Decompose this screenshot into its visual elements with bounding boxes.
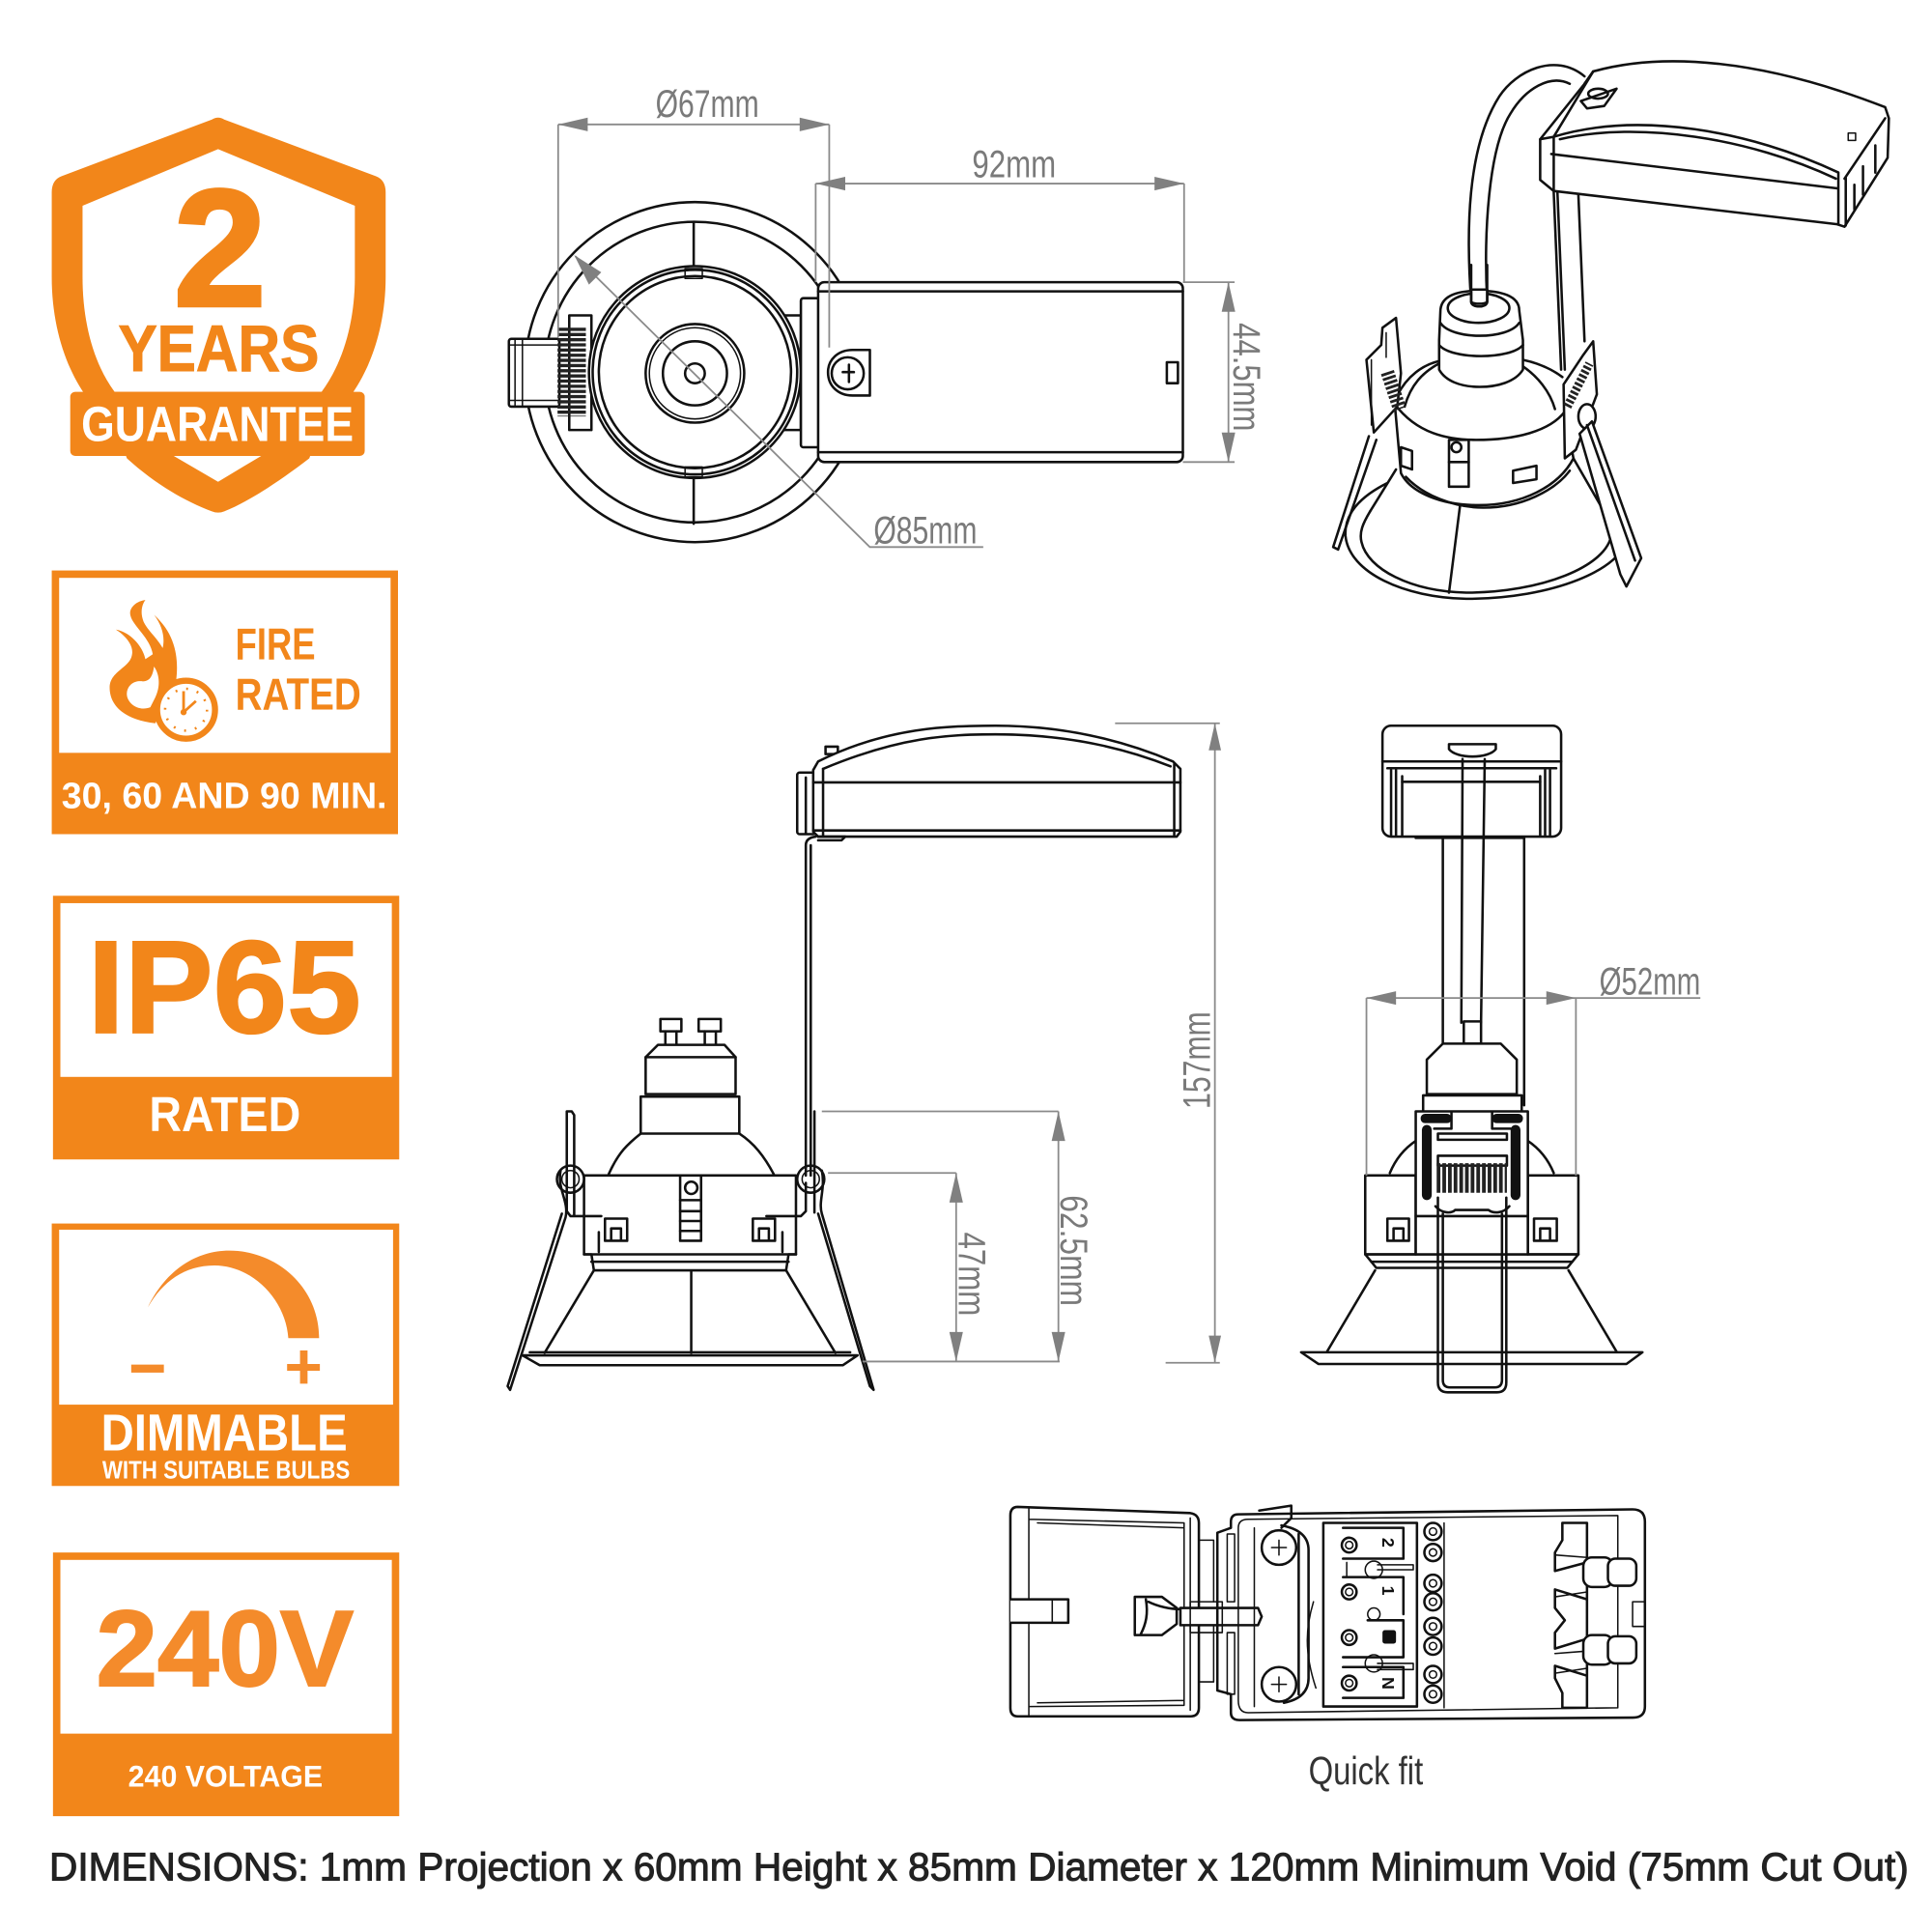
center catch (680, 1176, 701, 1240)
technical drawing: top view (509, 202, 1182, 542)
ip65 text: IP65 (88, 913, 361, 1061)
side windows (1387, 1218, 1409, 1240)
guarantee word: GUARANTEE (81, 397, 354, 452)
terminal block (1323, 1523, 1417, 1707)
dimension: 92mm (815, 144, 1184, 282)
cone (545, 1270, 836, 1353)
cable entry knobs (1555, 1523, 1645, 1708)
footer: dimensions text: DIMENSIONS: 1mm Projection x 60mm Height x 85mm Diameter x 120mm Minimum Void (75mm Cut Out) (49, 1844, 1909, 1889)
u clip (1438, 1198, 1506, 1392)
reflector flange (1346, 458, 1628, 599)
base flange (523, 1352, 858, 1365)
center hinge bar (1135, 1597, 1262, 1635)
icon: dimmer curve (131, 1251, 320, 1383)
dimension: 92mm: 92mm (972, 144, 1056, 186)
strap posts (1443, 759, 1524, 1105)
brackets (567, 1112, 814, 1216)
panel: dimmable (52, 1224, 399, 1486)
terminal block: N (1378, 1677, 1398, 1690)
cable (1469, 65, 1584, 301)
dimension: 157mm (1115, 724, 1221, 1363)
screws (1262, 1530, 1296, 1701)
240 voltage text: 240 VOLTAGE (128, 1758, 323, 1793)
dimmable text: DIMMABLE (101, 1405, 348, 1462)
dimension: 47mm (828, 1173, 992, 1361)
left spring clip (1333, 318, 1401, 550)
dome (1397, 359, 1562, 409)
side windows (605, 1218, 627, 1240)
years word: YEARS (118, 313, 319, 385)
technical drawing: side view (508, 725, 1180, 1390)
icon: flame with clock (110, 600, 215, 739)
flange (801, 298, 819, 447)
badge: 2 years guarantee shield (52, 118, 385, 513)
rated label: RATED (149, 1087, 300, 1142)
base flange (1301, 1352, 1642, 1364)
technical drawing: front view (1301, 725, 1642, 1392)
side boxes (1365, 1176, 1416, 1254)
dimension: 52mm (1367, 960, 1700, 1176)
main box (1217, 1506, 1645, 1720)
dimension: 85mm: Ø85mm (873, 509, 977, 552)
front view box (1382, 725, 1561, 838)
small dome (1390, 1141, 1553, 1173)
technical drawing: perspective view (1333, 61, 1889, 599)
dimension: 52mm: Ø52mm (1600, 960, 1700, 1003)
minutes text: 30, 60 AND 90 MIN. (62, 776, 387, 817)
box notch (1167, 362, 1178, 384)
technical drawing: quick fit terminal box (1010, 1506, 1645, 1720)
240v text: 240V (96, 1589, 354, 1709)
terminal labels: 2 (1378, 1538, 1398, 1548)
center bracket (1416, 1112, 1528, 1254)
panel: 240v (53, 1552, 399, 1816)
suitable bulbs text: WITH SUITABLE BULBS (102, 1456, 350, 1485)
cone (1327, 1270, 1616, 1351)
box latch (828, 350, 870, 395)
bulb cap (609, 1019, 774, 1175)
fire text: FIRE (236, 618, 316, 668)
dimension: 67mm (558, 83, 829, 348)
right spring clip (1564, 341, 1641, 586)
wire (806, 837, 815, 1176)
dimension: 44.5mm: 44.5mm (1225, 323, 1267, 431)
panel: fire rated (52, 571, 398, 835)
caption: quick fit: Quick fit (1309, 1748, 1424, 1793)
spring arms (508, 1171, 873, 1390)
socket (1427, 1043, 1517, 1094)
side view junction box (797, 725, 1180, 840)
perspective junction box (1540, 61, 1889, 227)
dimension: 157mm: 157mm (1177, 1011, 1219, 1109)
dimension: 62.5mm: 62.5mm (1052, 1195, 1094, 1306)
strap (1553, 192, 1584, 370)
dimension: 62.5mm (822, 1112, 1094, 1361)
panel: ip65 rated (53, 895, 399, 1159)
dimension: 67mm: Ø67mm (656, 83, 759, 126)
body (584, 1176, 796, 1270)
ring body (1395, 404, 1574, 505)
dimension: 44.5mm (1182, 282, 1267, 462)
dimension: 47mm: 47mm (950, 1233, 992, 1316)
junction box (818, 282, 1182, 462)
terminal ports (1424, 1523, 1444, 1708)
socket (1439, 291, 1523, 387)
terminal block: 1 (1378, 1586, 1398, 1596)
rated text: RATED (236, 669, 361, 720)
years number: 2 (174, 156, 267, 341)
dimension: 85mm (574, 255, 983, 553)
clip and spring (509, 327, 572, 416)
open lid (1010, 1507, 1213, 1717)
